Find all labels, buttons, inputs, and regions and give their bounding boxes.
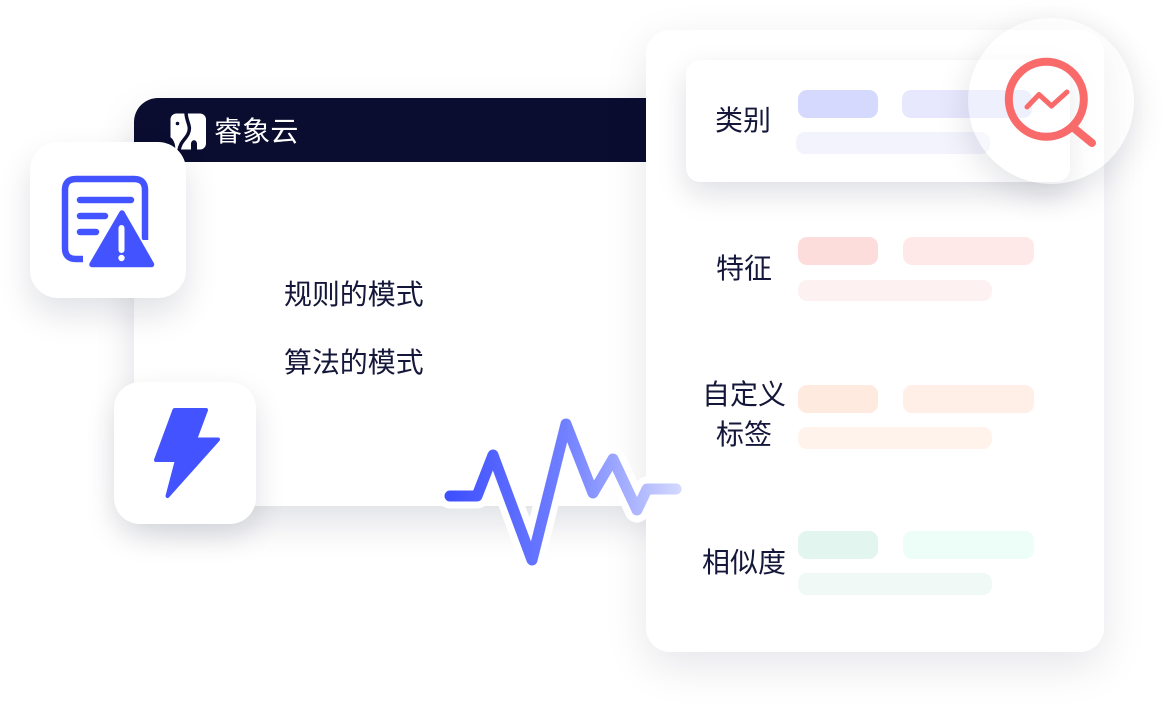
text: algorithm mode: 算法的模式: [284, 347, 424, 378]
tile: alert document: [30, 142, 186, 298]
panel: left rules window: [134, 98, 694, 506]
window header bar: [134, 98, 694, 162]
label: feature: 特征: [716, 253, 772, 284]
pills: category: [796, 90, 1032, 154]
card: category row highlight: [686, 60, 1070, 182]
panel: right feature list: [646, 30, 1104, 652]
label: similarity: 相似度: [702, 547, 786, 578]
pills: feature: [798, 237, 1034, 301]
text: rule mode: 规则的模式: [284, 279, 424, 310]
label: category: 类别: [715, 105, 771, 136]
pills: similarity: [798, 531, 1034, 595]
label: custom tags: [702, 379, 786, 450]
magnifier badge circle: [968, 18, 1134, 184]
logo: brand name: 睿象云: [214, 116, 299, 147]
pills: custom tags: [798, 385, 1034, 449]
label: custom tags: 自定义: [702, 379, 786, 410]
tile: lightning: [114, 382, 256, 524]
label: custom tags: 标签: [716, 419, 772, 450]
